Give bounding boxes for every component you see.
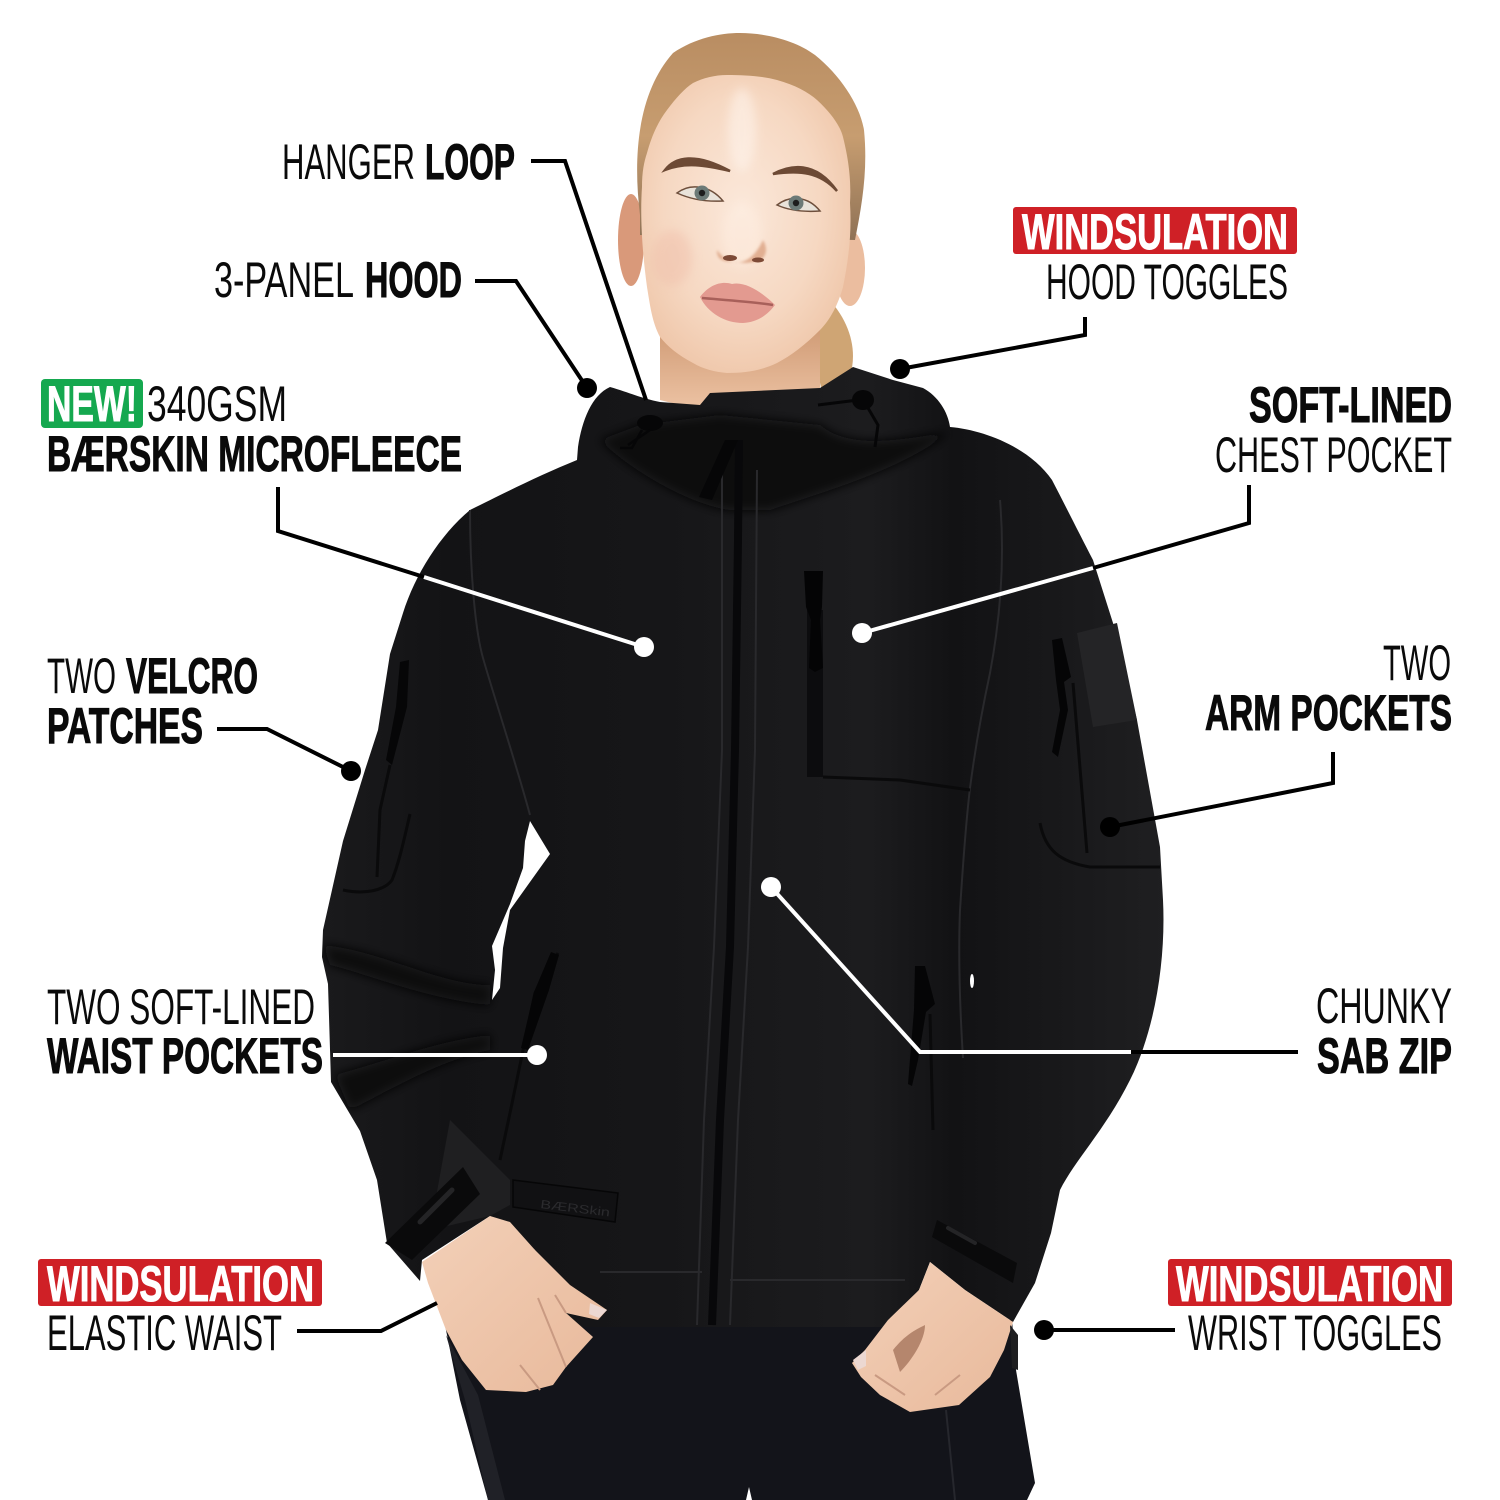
left hand [422,1216,607,1392]
callout: windsulation hood toggles: WINDSULATION [1022,204,1288,260]
callout: 3-panel hood [214,252,597,398]
right finger creases [875,1375,960,1395]
cuff strap left [385,1167,480,1260]
jacket body [322,367,1163,1327]
brand patch [513,1180,618,1222]
callout: windsulation elastic waist: ELASTIC WAIST [47,1305,282,1361]
right hand [852,1262,1013,1412]
chest pocket seam [823,777,970,790]
chest pocket tape [807,610,823,777]
velcro patch right [1077,623,1137,727]
arm pocket left [343,765,410,892]
left fingernail [589,1303,607,1318]
callout: soft-lined chest pocket [852,377,1452,643]
hair [637,33,865,240]
callout: windsulation hood toggles: HOOD TOGGLES [1046,254,1288,310]
left ear [618,194,644,286]
callout: two soft-lined waist pockets [47,979,547,1084]
chest zip pull [804,571,823,672]
callout: two arm pockets: TWO [1383,635,1451,691]
callout: two velcro patches: TWO [47,648,116,704]
hem seam [600,1272,905,1280]
right fingernail [853,1350,866,1370]
jacket folds and shadows [323,415,950,1110]
arm zip pull right [1052,638,1071,757]
right ear [835,230,865,306]
callout: two arm pockets [1100,635,1452,837]
centre zipper [712,440,739,1325]
hood toggle right [818,390,878,447]
lips [700,283,775,323]
neck [660,325,820,410]
callout: hanger loop: LOOP [425,134,515,190]
zipper tape edges [697,470,757,1325]
callout: new 340gsm microfleece: BÆRSKIN MICROFLEECE [47,426,462,482]
gap between torso and right arm [970,974,974,988]
callout: 3-panel hood: 3-PANEL [214,252,354,308]
callout: two soft-lined waist pockets: WAIST POCKETS [47,1028,323,1084]
waist pocket left [500,953,558,1160]
leggings side panel [446,1335,505,1500]
face [641,75,851,373]
eyebrows [665,158,837,191]
wrist toggle [1010,1325,1018,1370]
left finger creases [520,1295,566,1390]
sleeve seams [470,500,1002,1058]
callout: new 340gsm microfleece: 340GSM [147,376,287,432]
callout: two velcro patches: VELCRO [126,648,258,704]
callout: two velcro patches [47,648,361,781]
waist pocket right [930,1014,933,1130]
waist zip left [521,952,559,1050]
cuff strap right [932,1220,1017,1283]
arm pocket right [1040,683,1160,867]
face shading [652,88,762,286]
callout: chunky sab zip [761,877,1452,1084]
ponytail [817,295,853,392]
callout: hanger loop: HANGER [282,134,415,190]
callout: two soft-lined waist pockets: TWO SOFT-LINED [47,979,315,1035]
right finger gap [893,1325,925,1372]
callout: windsulation wrist toggles [1034,1256,1452,1361]
callout: windsulation elastic waist [38,1256,437,1361]
gap between arm and torso [492,821,550,1000]
callout: 3-panel hood: HOOD [365,252,462,308]
hood toggle left [620,415,663,448]
callout: new 340gsm microfleece [41,376,654,657]
arm zip pull left [386,660,409,765]
callout: windsulation hood toggles [890,204,1297,379]
callout: new 340gsm microfleece: NEW! [47,376,137,432]
collar zip pull [699,440,738,500]
model wearing black fleece jacket [322,33,1163,1500]
brand patch: BÆRSkin [540,1197,611,1220]
callout: two velcro patches: PATCHES [47,698,203,754]
callout: hanger loop [282,134,646,400]
nose [717,240,766,263]
leggings [444,1320,1035,1500]
callout: windsulation elastic waist: WINDSULATION [47,1256,314,1312]
leggings seam [946,1410,955,1500]
eyes [677,187,820,211]
waist zip right [908,966,935,1086]
cuff fleece left [430,1120,510,1230]
